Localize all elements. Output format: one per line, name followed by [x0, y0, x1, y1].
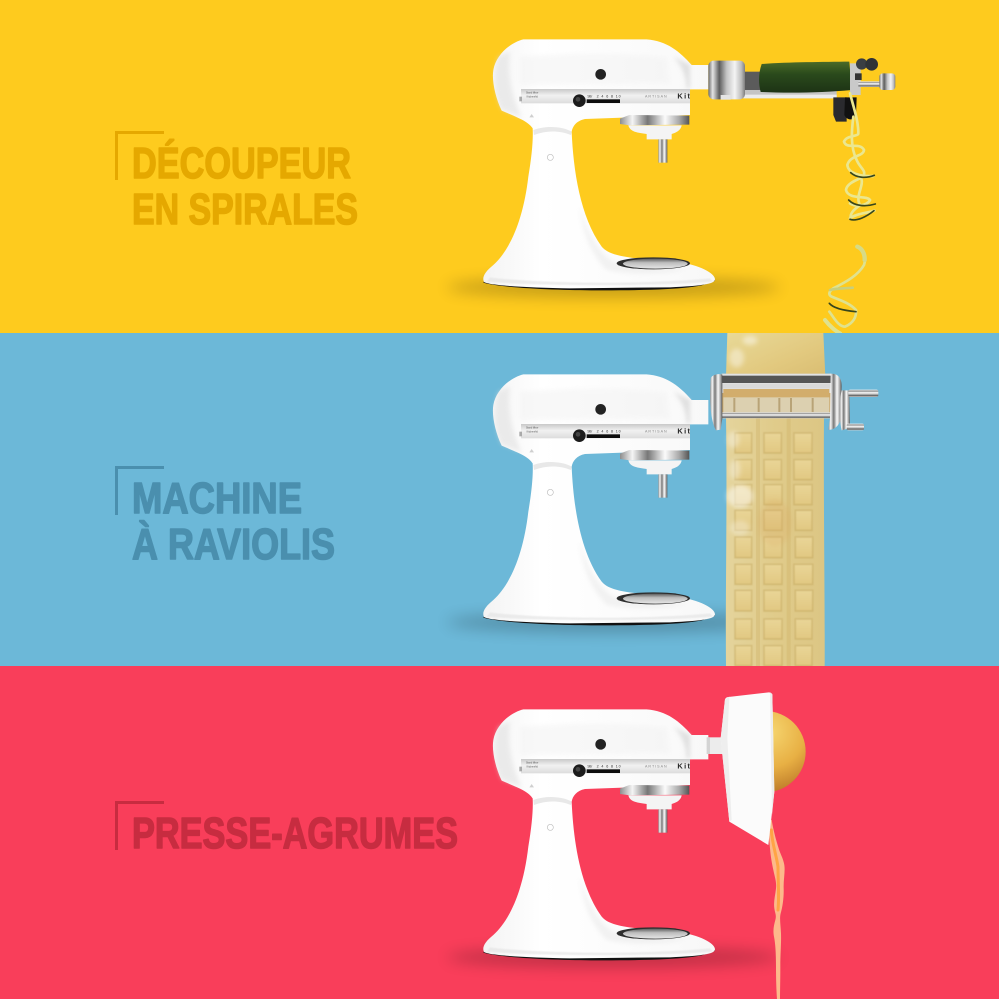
lemon — [724, 711, 806, 792]
panel: citrus press — [0, 666, 999, 999]
stand mixer: ARTISAN — [645, 430, 667, 434]
stand mixer: Stir — [587, 765, 593, 769]
stand mixer: Kit — [677, 427, 691, 436]
stand mixer — [447, 374, 780, 632]
panel: ravioli maker — [0, 333, 999, 666]
stand mixer: 2 4 6 8 10 — [597, 430, 621, 434]
heading: machine à raviolis — [132, 474, 335, 569]
stand mixer: KitchenAid — [527, 765, 539, 768]
title bracket — [115, 131, 164, 180]
stand mixer: ARTISAN — [645, 765, 667, 769]
heading: machine à raviolis: À RAVIOLIS — [132, 519, 335, 569]
panel: spiral cutter — [0, 0, 999, 333]
press stem — [707, 737, 727, 754]
ravioli sheet and roller attachment — [710, 333, 878, 666]
stand mixer — [447, 39, 780, 297]
citrus press attachment with lemon and juice — [707, 692, 806, 999]
ravioli sheet — [726, 336, 825, 666]
heading: découpeur en spirales: DÉCOUPEUR — [132, 138, 351, 188]
stand mixer: Stand Mixer — [526, 426, 539, 429]
stand mixer: Kit — [677, 92, 691, 101]
dough above roller — [726, 333, 825, 376]
panel background: blue — [0, 333, 999, 666]
stand mixer: KitchenAid — [527, 95, 539, 98]
title bracket — [115, 466, 164, 515]
heading: découpeur en spirales — [132, 138, 358, 234]
stand mixer — [447, 709, 780, 967]
panel background: yellow — [0, 0, 999, 333]
stand mixer: 2 4 6 8 10 — [597, 95, 621, 99]
panel background: red — [0, 666, 999, 999]
heading: découpeur en spirales: EN SPIRALES — [132, 185, 358, 234]
stand mixer: Stand Mixer — [526, 761, 539, 764]
spiral cutter attachment — [708, 58, 895, 333]
heading: presse-agrumes: PRESSE-AGRUMES — [132, 809, 458, 858]
stand mixer: 2 4 6 8 10 — [597, 765, 621, 769]
stand mixer: Stir — [587, 430, 593, 434]
title bracket — [115, 801, 164, 850]
juice stream — [769, 820, 785, 999]
stand mixer: KitchenAid — [527, 430, 539, 433]
press body — [721, 692, 774, 845]
stand mixer: Stand Mixer — [526, 91, 539, 94]
heading: machine à raviolis: MACHINE — [132, 474, 302, 523]
stand mixer: Kit — [677, 762, 691, 771]
stand mixer: ARTISAN — [645, 95, 667, 99]
stand mixer: Stir — [587, 95, 593, 99]
roller frame — [710, 374, 878, 430]
